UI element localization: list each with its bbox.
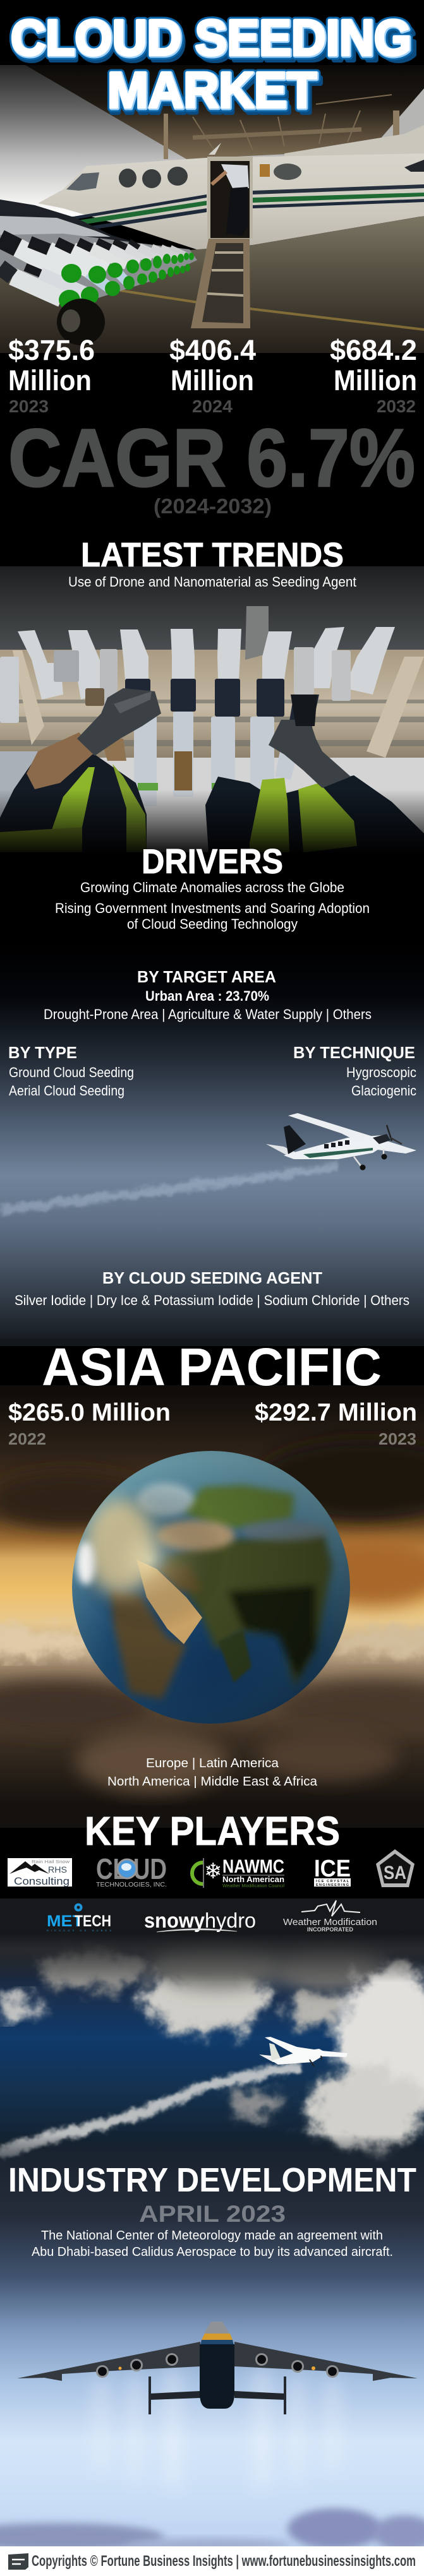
segment: by type (8, 1043, 134, 1099)
title: CLOUD SEEDING (11, 10, 412, 66)
market size stat 2023 (8, 334, 95, 416)
logo: Cloud Technologies: TECHNOLOGIES, INC. (96, 1881, 167, 1888)
logo: RHS Consulting: Rain Hail Snow (32, 1860, 70, 1864)
regional stat 2023: $292.7 Million (255, 1399, 417, 1426)
logo: RHS Consulting: Consulting (14, 1875, 70, 1887)
segment: by type: Ground Cloud Seeding (9, 1064, 134, 1080)
development description: Abu Dhabi-based Calidus Aerospace to buy its advanced aircraft. (32, 2245, 393, 2259)
driver texts (55, 880, 370, 932)
hero photo: aircraft with seeding flares (0, 65, 424, 353)
market size stat 2032 (330, 334, 417, 416)
logo: SA pentagon: SA (384, 1863, 406, 1883)
seeding trail (0, 1166, 338, 1209)
heading: latest trends: LATEST TRENDS (81, 536, 344, 574)
market size stat 2023: $375.6 (8, 334, 95, 366)
CAGR period: (2024-2032) (154, 494, 272, 518)
logo: NAWMC: Weather Modification Council (222, 1884, 284, 1888)
title: CLOUD SEEDING (11, 9, 411, 66)
icon: heavy transport aircraft (17, 2322, 418, 2414)
market size stat 2032: 2032 (377, 397, 416, 416)
logo: Weather Modification Incorporated: Weather Modification (283, 1917, 377, 1928)
logo: Snowy Hydro: hydro (205, 1909, 256, 1932)
trend text: Use of Drone and Nanomaterial as Seeding Agent (68, 574, 356, 590)
panel: key players band (0, 1806, 424, 1932)
icon: earth globe (72, 1451, 350, 1724)
logo: RHS Consulting (8, 1858, 72, 1887)
title (11, 9, 417, 123)
title: MARKET (107, 62, 317, 118)
development date: APRIL 2023 (139, 2201, 286, 2227)
regional stat 2022 (8, 1399, 171, 1448)
segment: by target area: Drought-Prone Area | Agriculture & Water Supply | Others (44, 1006, 372, 1022)
logo: Weather Modification Incorporated (283, 1900, 377, 1933)
logo: NAWMC: North American (222, 1875, 284, 1884)
segment: by target area: BY TARGET AREA (137, 967, 276, 986)
logo: Cloud Technologies: CL UD (96, 1852, 167, 1885)
market size stat 2024: $406.4 (169, 334, 256, 366)
icon: seeding aircraft (266, 1113, 416, 1171)
panel: segmentation background (0, 941, 424, 1345)
heading: drivers: DRIVERS (142, 842, 283, 881)
market size stat 2023: 2023 (9, 397, 49, 416)
driver texts: Growing Climate Anomalies across the Globe (80, 880, 344, 895)
logo: Snowy Hydro (144, 1909, 256, 1932)
logo: NAWMC (192, 1856, 284, 1888)
heading: key players: KEY PLAYERS (85, 1808, 340, 1854)
segment: by type: BY TYPE (8, 1043, 77, 1062)
logo: NAWMC: NAWMC (222, 1856, 284, 1877)
title: MARKET (108, 63, 317, 119)
driver texts: Rising Government Investments and Soaring Adoption (55, 900, 370, 916)
logo: ICE Crystal Engineering: ICE (314, 1856, 351, 1882)
segment: by type: Aerial Cloud Seeding (9, 1083, 124, 1099)
regional stat 2023: 2023 (379, 1429, 416, 1448)
logo: Mettech (47, 1903, 111, 1932)
market size stat 2024: 2024 (192, 397, 233, 416)
logo: SA pentagon (376, 1849, 415, 1887)
logo: ICE Crystal Engineering: ICE CRYSTAL (316, 1880, 349, 1883)
panel: sunset clouds background (0, 1339, 424, 1806)
other regions: Europe | Latin America (146, 1756, 279, 1770)
segment: by cloud seeding agent (15, 1268, 409, 1308)
driver texts: of Cloud Seeding Technology (127, 916, 298, 932)
title: CLOUD SEEDING (11, 10, 412, 66)
segment: by technique (293, 1043, 416, 1099)
regional stat 2022: 2022 (8, 1429, 46, 1448)
market size stat 2024 (169, 334, 256, 416)
title: MARKET (109, 67, 321, 123)
market size stat 2032: $684.2 (330, 334, 417, 366)
segment: by technique: Glaciogenic (351, 1083, 416, 1099)
icon: aircraft over clouds (259, 2037, 348, 2066)
development description: The National Center of Meteorology made an agreement with (41, 2229, 383, 2243)
logo: Weather Modification Incorporated: INCORPORATED (307, 1926, 353, 1933)
logo: ICE Crystal Engineering: ENGINEERING (316, 1883, 349, 1887)
panel: cloud and forest aerial photo (0, 1932, 424, 2185)
title: CLOUD SEEDING (13, 15, 417, 71)
panel: sky with heavy transport aircraft (0, 2172, 424, 2551)
logo: NAWMC: ❄ (204, 1859, 222, 1883)
market size stat 2023: Million (8, 364, 92, 397)
segment: by target area: Urban Area : 23.70% (145, 988, 269, 1004)
regional stat 2022: $265.0 Million (8, 1399, 171, 1426)
logo: Mettech: RIESGOS DE NUBES (47, 1929, 111, 1932)
logo: Mettech: TECH (75, 1912, 111, 1930)
logo: Mettech: MET (47, 1912, 83, 1930)
segment: by cloud seeding agent: BY CLOUD SEEDING AGENT (102, 1268, 322, 1287)
segment: by technique: BY TECHNIQUE (293, 1043, 415, 1062)
heading: asia pacific: ASIA PACIFIC (42, 1337, 382, 1397)
title: MARKET (108, 63, 317, 119)
regional stat 2023 (255, 1399, 417, 1448)
segment: by technique: Hygroscopic (346, 1064, 416, 1080)
photo: technicians fitting seeding flares (0, 566, 424, 852)
other regions (107, 1756, 318, 1789)
footer: copyright (0, 2546, 424, 2576)
segment: by target area (44, 967, 372, 1022)
development description (32, 2229, 393, 2259)
market size stat 2024: Million (171, 364, 254, 397)
market size stat 2032: Million (334, 364, 417, 397)
logo: RHS Consulting: RHS (48, 1864, 67, 1875)
logo: Snowy Hydro: snowy (144, 1909, 205, 1932)
other regions: North America | Middle East & Africa (107, 1775, 318, 1789)
